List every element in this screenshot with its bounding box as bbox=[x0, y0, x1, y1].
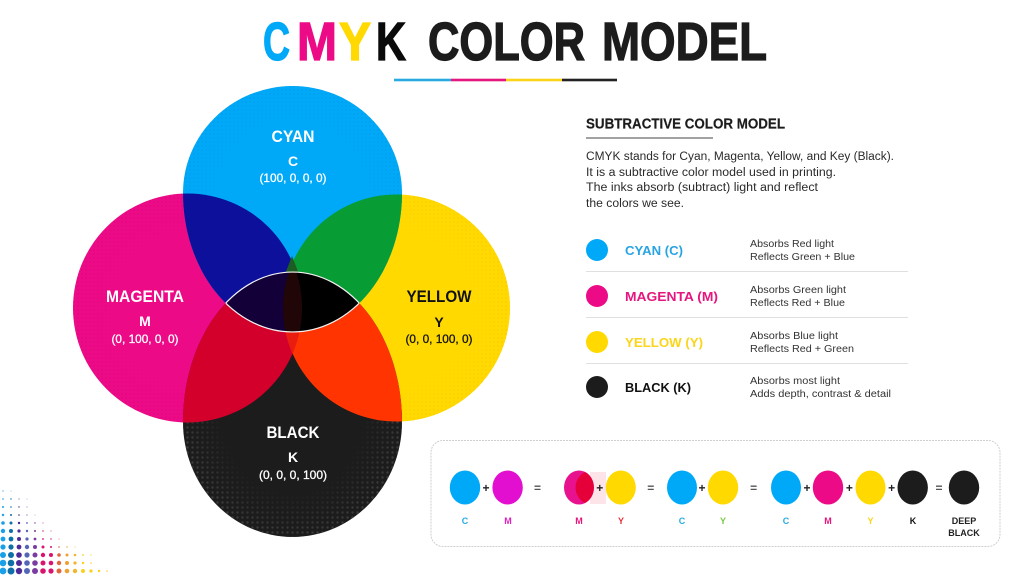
halftone corner decoration bbox=[0, 490, 108, 574]
row: black: Absorbs most light bbox=[750, 376, 840, 387]
row: yellow: Absorbs Blue light bbox=[750, 331, 838, 342]
magenta circle bbox=[73, 194, 226, 422]
operators: + bbox=[888, 481, 895, 495]
venn diagram bbox=[73, 86, 510, 537]
operators: + bbox=[698, 481, 706, 495]
title: C bbox=[263, 12, 290, 72]
row: black bbox=[586, 376, 891, 400]
description text: The inks absorb (subtract) light and reflect bbox=[586, 182, 819, 194]
label: cyan: CYAN bbox=[272, 127, 314, 146]
black circle bbox=[183, 303, 402, 537]
swatch labels: K bbox=[910, 516, 917, 526]
row: cyan: Reflects Green + Blue bbox=[750, 252, 855, 263]
row: cyan: Absorbs Red light bbox=[750, 239, 834, 250]
operators: = bbox=[750, 481, 757, 495]
title: Y bbox=[339, 12, 371, 72]
label: magenta: M bbox=[139, 313, 151, 329]
operators: + bbox=[482, 481, 490, 495]
overlap: green bbox=[294, 194, 402, 303]
row: yellow: YELLOW (Y) bbox=[625, 335, 703, 350]
centre eye outline bbox=[225, 272, 360, 332]
yellow circle bbox=[359, 194, 510, 422]
title: COLOR bbox=[428, 12, 585, 72]
swatch labels bbox=[462, 516, 980, 538]
centre eye overlap bbox=[226, 272, 358, 332]
label: black: K bbox=[288, 449, 298, 465]
description text: It is a subtractive color model used in printing. bbox=[586, 167, 836, 179]
row: black: BLACK (K) bbox=[625, 380, 691, 395]
operators: + bbox=[846, 481, 853, 495]
title: K bbox=[376, 12, 406, 72]
row: magenta: Reflects Red + Blue bbox=[750, 298, 845, 309]
swatch labels: Y bbox=[867, 516, 874, 526]
label: black bbox=[259, 423, 327, 482]
label: cyan: C bbox=[288, 153, 298, 169]
panel: mixing equations bbox=[431, 440, 1000, 546]
row: black: Adds depth, contrast & detail bbox=[750, 389, 891, 400]
label: yellow: YELLOW bbox=[406, 287, 472, 306]
label: black: BLACK bbox=[266, 423, 320, 442]
row: magenta: MAGENTA (M) bbox=[625, 289, 718, 304]
swatch labels: C bbox=[679, 516, 686, 526]
operators: + bbox=[803, 481, 811, 495]
label: yellow: Y bbox=[434, 314, 444, 330]
description text: the colors we see. bbox=[586, 198, 684, 210]
description text bbox=[586, 151, 894, 210]
label: magenta bbox=[106, 287, 184, 346]
row: yellow bbox=[586, 331, 854, 355]
overlap: red bbox=[183, 303, 292, 422]
swatch labels: Y bbox=[618, 516, 624, 526]
label: yellow bbox=[406, 287, 472, 346]
swatch labels: M bbox=[824, 516, 832, 526]
row: cyan: CYAN (C) bbox=[625, 243, 683, 258]
section heading: SUBTRACTIVE COLOR MODEL bbox=[586, 116, 785, 132]
label: magenta: (0, 100, 0, 0) bbox=[112, 332, 178, 346]
swatch labels: BLACK bbox=[948, 528, 980, 538]
operators bbox=[482, 481, 943, 495]
title: MODEL bbox=[602, 12, 767, 72]
description text: CMYK stands for Cyan, Magenta, Yellow, and Key (Black). bbox=[586, 151, 894, 163]
label: cyan bbox=[260, 127, 326, 185]
label: yellow: (0, 0, 100, 0) bbox=[406, 332, 472, 346]
label: black: (0, 0, 0, 100) bbox=[259, 468, 327, 482]
title bbox=[263, 12, 767, 72]
row: yellow: Reflects Red + Green bbox=[750, 344, 854, 355]
row: cyan bbox=[586, 239, 855, 263]
operators: = bbox=[534, 481, 541, 495]
row: magenta bbox=[586, 285, 846, 309]
overlap: blue bbox=[183, 194, 291, 303]
cyan circle bbox=[183, 86, 402, 303]
swatch labels: C bbox=[783, 516, 790, 526]
swatch labels: M bbox=[504, 516, 512, 526]
swatch labels: C bbox=[462, 516, 469, 526]
operators: + bbox=[596, 481, 603, 495]
swatch labels: DEEP bbox=[952, 516, 976, 526]
swatch labels: Y bbox=[720, 516, 726, 526]
overlap: orange bbox=[286, 303, 402, 422]
title: M bbox=[297, 12, 337, 72]
label: cyan: (100, 0, 0, 0) bbox=[260, 171, 326, 185]
operators: = bbox=[935, 481, 943, 495]
label: magenta: MAGENTA bbox=[106, 287, 184, 306]
overlap: magenta and yellow above centre bbox=[283, 194, 510, 422]
title underline bbox=[394, 79, 617, 81]
wedge above centre bbox=[285, 256, 299, 274]
overlap: magenta and yellow below centre bbox=[286, 332, 300, 353]
swatch labels: M bbox=[575, 516, 583, 526]
row: magenta: Absorbs Green light bbox=[750, 285, 846, 296]
operators: = bbox=[647, 481, 654, 495]
swatches bbox=[450, 470, 979, 504]
